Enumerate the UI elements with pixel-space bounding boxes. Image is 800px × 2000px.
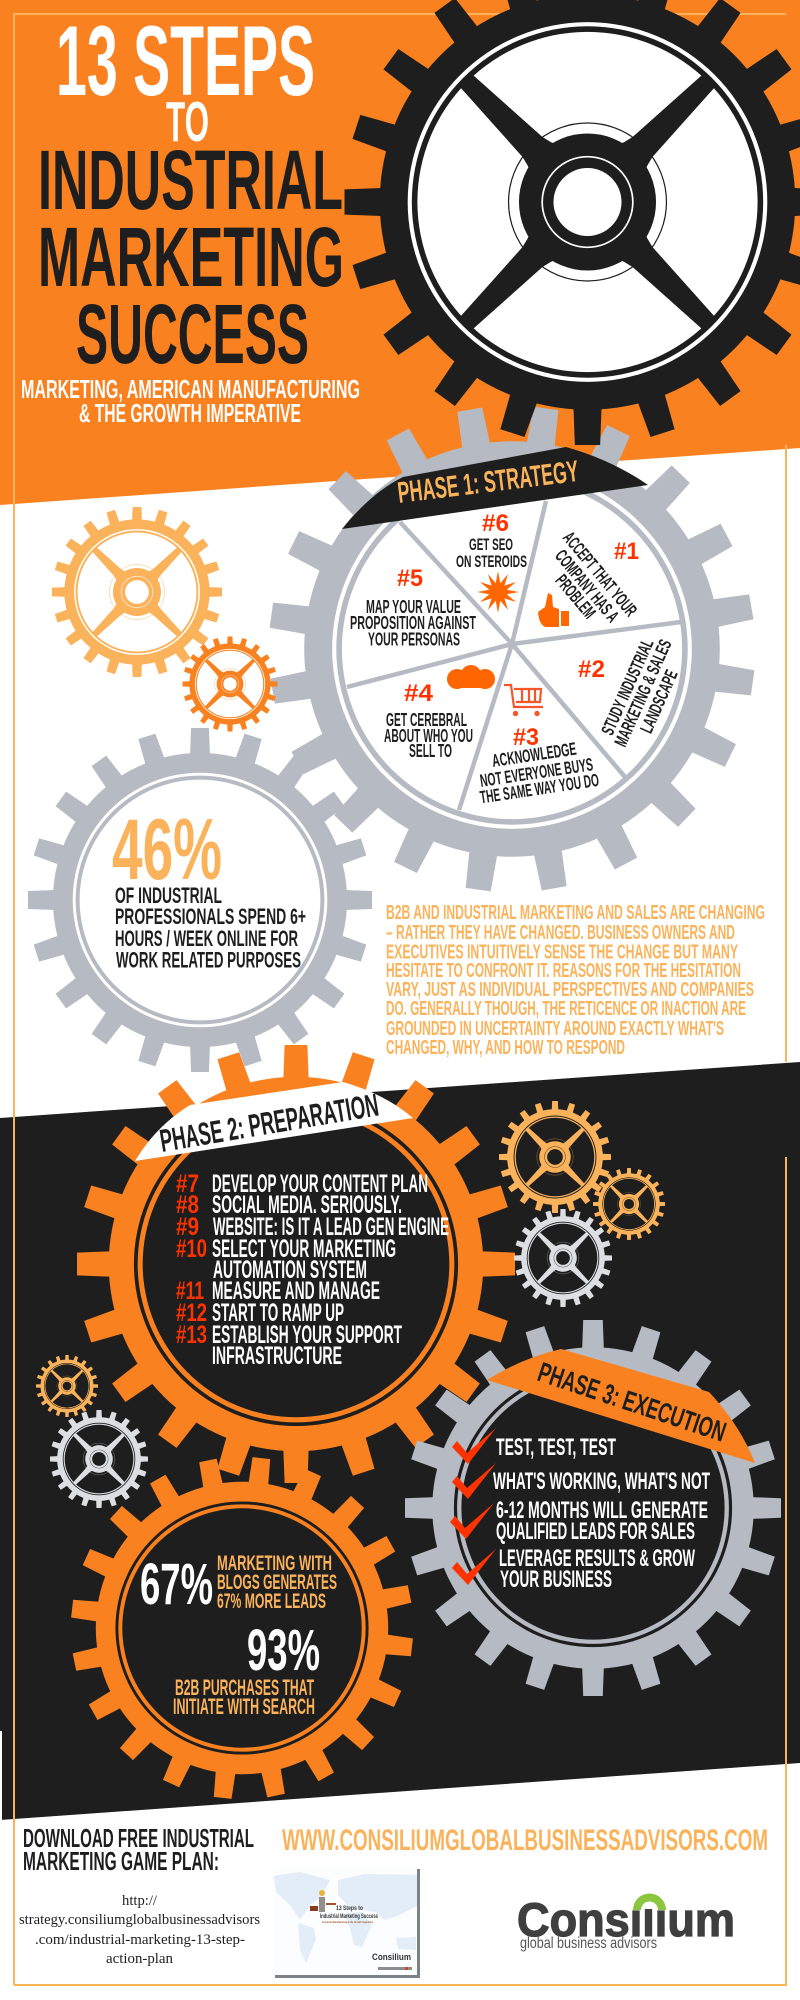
title: 13 STEPS <box>56 5 315 116</box>
stat: 93%: INITIATE WITH SEARCH <box>173 1694 315 1719</box>
pie dividers <box>347 501 681 810</box>
subtitle <box>21 374 360 428</box>
phase 2 step list: #7 <box>176 1170 199 1198</box>
small gear: light orange left <box>36 1355 98 1417</box>
gear: phase 3 <box>405 1320 781 1696</box>
title: TO <box>166 90 209 154</box>
logo: consilium: global business advisors <box>520 1935 657 1952</box>
46% caption: WORK RELATED PURPOSES <box>116 948 301 972</box>
intro paragraph: CHANGED, WHY, AND HOW TO RESPOND <box>386 1037 625 1059</box>
phase 2 step list: SELECT YOUR MARKETING <box>212 1235 396 1263</box>
icon: sun <box>477 571 519 613</box>
icon: thumbs up <box>538 593 569 627</box>
gear: phase 2 <box>77 1045 515 1483</box>
stat: 67%: 67% <box>140 1552 213 1617</box>
step 5: MAP YOUR VALUE <box>366 597 461 617</box>
step 2: STUDY INDUSTRIAL <box>597 636 658 738</box>
phase 2 step list: MEASURE AND MANAGE <box>212 1277 380 1305</box>
step 3 <box>479 724 600 807</box>
icon: cloud <box>447 665 495 689</box>
phase 2 step list: #9 <box>176 1213 199 1241</box>
phase 2 step list: AUTOMATION SYSTEM <box>213 1256 367 1284</box>
phase 2 step list: INFRASTRUCTURE <box>212 1342 342 1370</box>
stat: 67% <box>140 1552 337 1617</box>
small gear: orange <box>182 636 278 732</box>
phase 2 banner <box>135 1082 413 1161</box>
46% caption: HOURS / WEEK ONLINE FOR <box>115 926 298 951</box>
thumbnail: game plan cover: Industrial Marketing Success <box>320 1913 378 1920</box>
step 3: ACKNOWLEDGE <box>491 739 578 771</box>
download link: action-plan <box>106 1951 173 1967</box>
step 4: SELL TO <box>409 741 452 761</box>
step 3: THE SAME WAY YOU DO <box>479 770 600 807</box>
panel: phase 1 pie <box>342 447 682 810</box>
step 2: MARKETING & SALES <box>610 636 676 750</box>
46% caption: PROFESSIONALS SPEND 6+ <box>115 904 306 929</box>
phase 2 step list: #11 <box>176 1277 204 1305</box>
small gear: light orange <box>52 507 222 677</box>
46% caption <box>115 883 306 972</box>
title <box>38 5 344 381</box>
phase 2 banner: PHASE 2: PREPARATION <box>157 1087 381 1159</box>
phase 3 list: TEST, TEST, TEST <box>496 1434 616 1461</box>
step 2: #2 <box>578 656 605 683</box>
download link: http:// <box>122 1893 158 1909</box>
phase 3 list: YOUR BUSINESS <box>500 1566 612 1593</box>
step 6: GET SEO <box>469 535 513 554</box>
phase 2 step list: #8 <box>176 1191 199 1219</box>
thumbnail: game plan cover: American Manufacturing & the Growth Imperative <box>322 1920 373 1924</box>
phase 3 checkmarks <box>450 1428 496 1585</box>
gear: stats <box>53 1439 431 1817</box>
phase 2 step list: WEBSITE: IS IT A LEAD GEN ENGINE <box>213 1213 449 1241</box>
download heading <box>23 1823 254 1876</box>
phase 2 step list: #10 <box>176 1235 207 1263</box>
download link <box>19 1893 260 1967</box>
step 4 <box>384 680 473 761</box>
step 1: #1 <box>614 538 639 565</box>
step 4: #4 <box>404 680 434 707</box>
title: SUCCESS <box>76 287 309 381</box>
phase 1 banner: PHASE 1: STRATEGY <box>396 455 580 510</box>
phase 2 step list <box>176 1170 449 1370</box>
phase 2 step list: ESTABLISH YOUR SUPPORT <box>212 1321 402 1349</box>
dark middle background <box>0 1062 800 1820</box>
step 1: PROBLEM <box>551 571 600 622</box>
small gear: light orange right 2 <box>593 1168 665 1240</box>
phase 1 banner <box>342 447 648 529</box>
phase 3 list <box>493 1434 710 1593</box>
small gear: grey right <box>514 1209 612 1307</box>
step 4: GET CEREBRAL <box>386 710 467 730</box>
stat: 93%: 93% <box>247 1618 320 1683</box>
step 6 <box>456 510 527 571</box>
small gear: grey left <box>50 1410 148 1508</box>
big black gear <box>344 0 800 445</box>
stat: 93%: B2B PURCHASES THAT <box>175 1675 314 1700</box>
step 6: #6 <box>482 510 509 537</box>
icon: cart <box>504 685 543 715</box>
step 3: NOT EVERYONE BUYS <box>479 754 594 791</box>
title: INDUSTRIAL <box>38 133 343 227</box>
subtitle: & THE GROWTH IMPERATIVE <box>79 398 301 428</box>
gear: phase 1 <box>238 375 786 923</box>
46% caption: OF INDUSTRIAL <box>115 883 222 908</box>
step 2 <box>578 636 682 750</box>
step 5: YOUR PERSONAS <box>368 630 460 650</box>
stat: 93% <box>173 1618 320 1719</box>
download heading: DOWNLOAD FREE INDUSTRIAL <box>23 1823 254 1853</box>
title: MARKETING <box>38 210 344 304</box>
step 2: LANDSCAPE <box>636 667 682 736</box>
thumbnail: game plan cover <box>273 1867 420 1978</box>
step 1 <box>551 528 641 626</box>
thumbnail: game plan cover: Consilium <box>372 1952 411 1963</box>
download link: .com/industrial-marketing-13-step- <box>35 1932 245 1948</box>
orange header background <box>0 0 800 505</box>
download heading: MARKETING GAME PLAN: <box>23 1846 219 1876</box>
logo: consilium: Consilium <box>517 1893 735 1946</box>
phase 2 step list: START TO RAMP UP <box>212 1299 344 1327</box>
stat: 67%: 67% MORE LEADS <box>217 1590 326 1613</box>
step 3: #3 <box>513 724 539 751</box>
stat: 67%: BLOGS GENERATES <box>217 1571 337 1594</box>
step 1: ACCEPT THAT YOUR <box>559 528 641 620</box>
download link: strategy.consiliumglobalbusinessadvisors <box>19 1912 260 1928</box>
phase 2 step list: #13 <box>176 1321 207 1349</box>
step 5: PROPOSITION AGAINST <box>350 613 476 633</box>
46% number: 46% <box>112 802 222 898</box>
step 5: #5 <box>397 565 423 592</box>
subtitle: MARKETING, AMERICAN MANUFACTURING <box>21 374 360 404</box>
phase 3 banner <box>487 1349 755 1463</box>
step 4: ABOUT WHO YOU <box>384 726 473 746</box>
small gear: light orange right <box>499 1101 611 1213</box>
intro paragraph <box>386 902 765 1059</box>
step 1: COMPANY HAS A <box>551 546 623 626</box>
phase 2 step list: #12 <box>176 1299 207 1327</box>
step 6: ON STEROIDS <box>456 552 527 571</box>
phase 2 step list: SOCIAL MEDIA. SERIOUSLY. <box>212 1191 402 1219</box>
stat: 67%: MARKETING WITH <box>217 1552 332 1575</box>
gear: 46% stat <box>28 728 372 1072</box>
step 5 <box>350 565 476 650</box>
thumbnail: game plan cover: 13 Steps to <box>336 1906 363 1912</box>
phase 2 step list: DEVELOP YOUR CONTENT PLAN <box>212 1170 428 1198</box>
